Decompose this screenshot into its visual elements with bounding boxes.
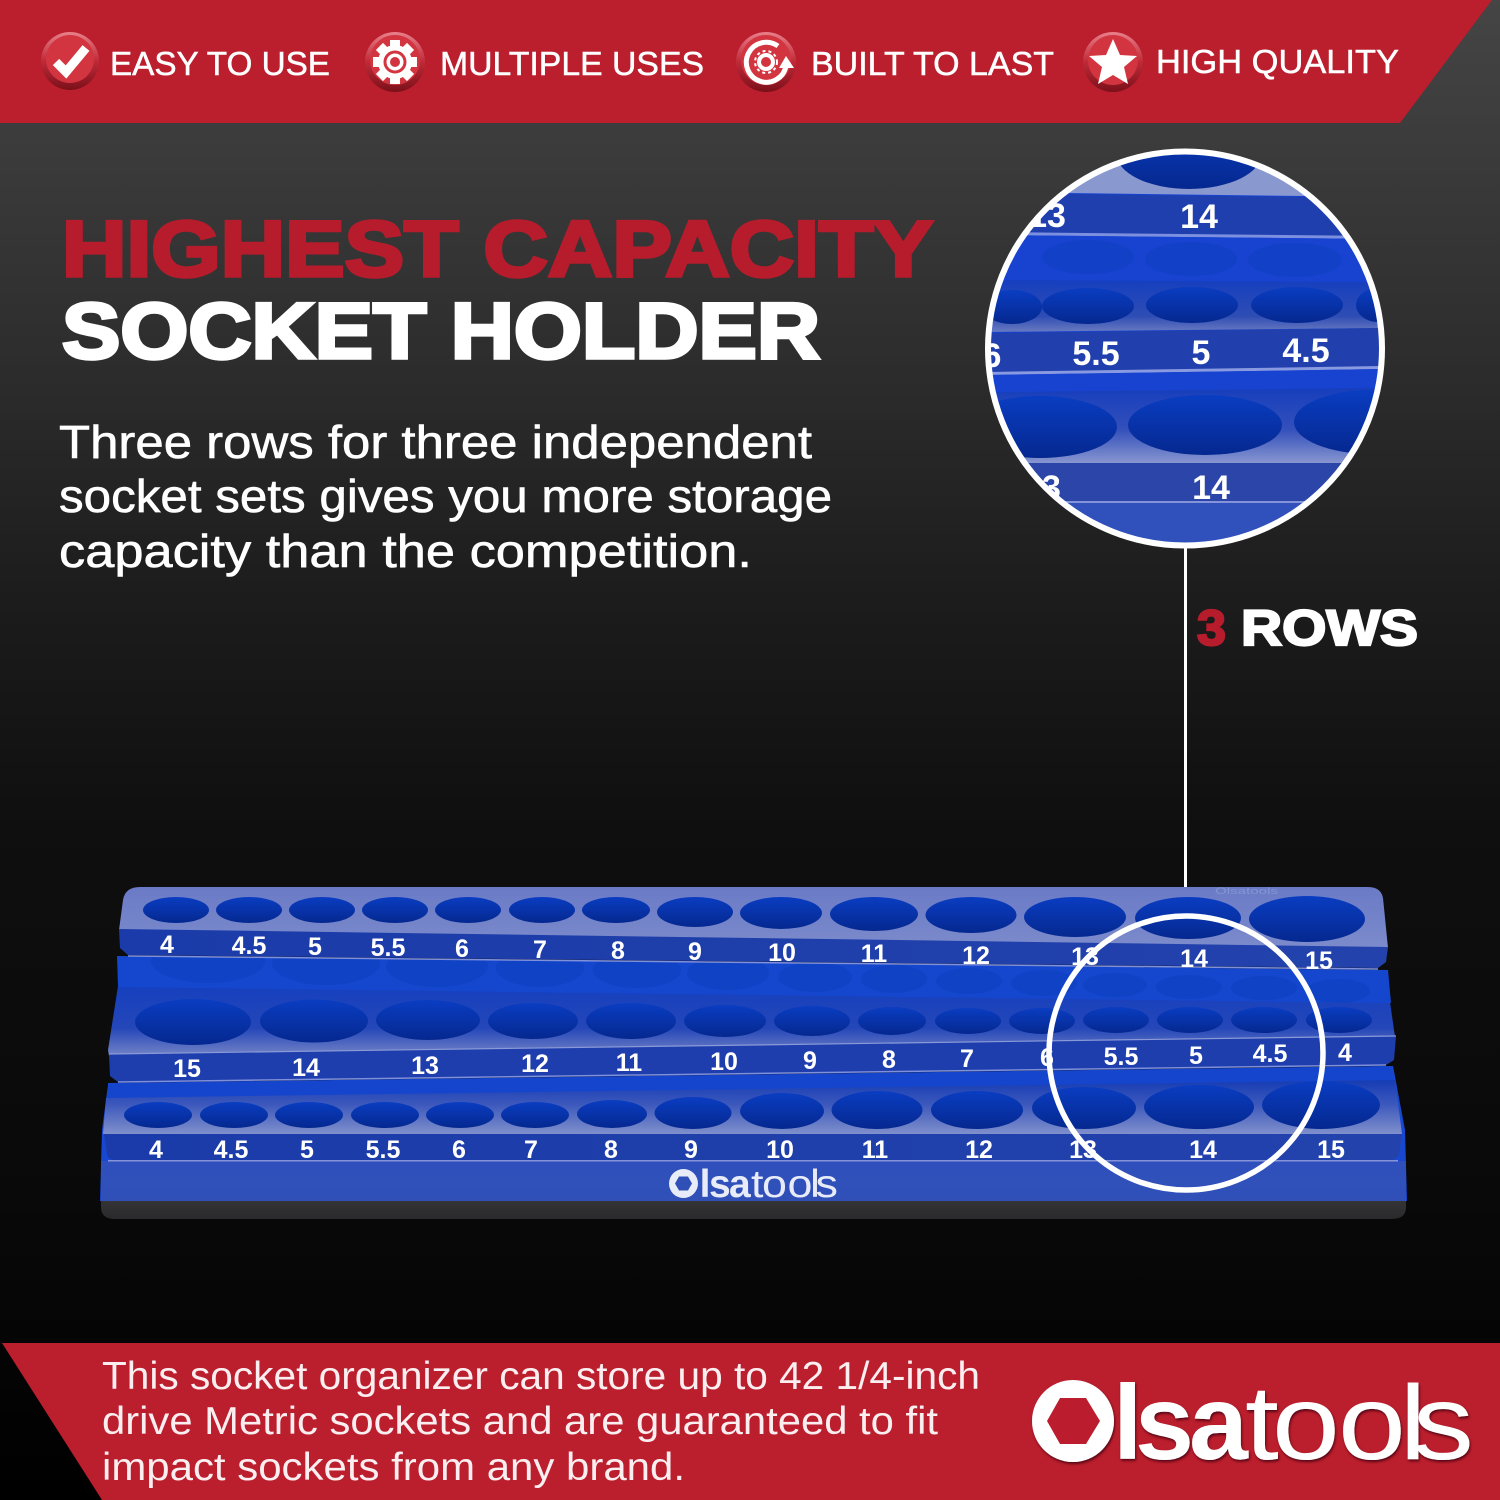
bottom row labels bbox=[149, 1136, 1345, 1164]
bottom row sockets bbox=[124, 1081, 1380, 1129]
badge: easy to use bbox=[41, 32, 330, 90]
bottom row labels: 14 bbox=[1189, 1136, 1217, 1164]
top row labels: 4 bbox=[160, 931, 174, 959]
heading: HIGHEST CAPACITY bbox=[62, 204, 933, 293]
middle row labels: 8 bbox=[882, 1046, 896, 1074]
middle row labels: 12 bbox=[521, 1050, 549, 1078]
middle row sockets bbox=[135, 999, 1372, 1045]
bottom row labels: 11 bbox=[862, 1136, 888, 1164]
top row labels: 5.5 bbox=[371, 934, 405, 962]
badge: multiple uses bbox=[365, 32, 704, 92]
magnified lens: 14 bbox=[1192, 469, 1230, 507]
top red banner bbox=[0, 0, 1492, 123]
front face bbox=[101, 1161, 1406, 1201]
top row labels: 14 bbox=[1180, 945, 1208, 973]
bottom row labels: 15 bbox=[1317, 1136, 1345, 1164]
middle row labels: 13 bbox=[411, 1052, 439, 1080]
bottom row labels: 10 bbox=[766, 1136, 794, 1164]
bottom row labels: 13 bbox=[1069, 1136, 1097, 1164]
middle row labels bbox=[173, 1039, 1352, 1083]
badge: built to last bbox=[736, 32, 1054, 92]
brand logo: lsa bbox=[1113, 1364, 1249, 1482]
top row labels: 11 bbox=[861, 940, 887, 968]
bottom row labels: 9 bbox=[684, 1136, 698, 1164]
bottom red banner bbox=[2, 1343, 1500, 1500]
top row labels: 12 bbox=[962, 942, 990, 970]
brand logo: tools bbox=[1245, 1364, 1474, 1482]
faint engraved logo: Olsatools bbox=[1215, 886, 1279, 896]
product logo: Olsa bbox=[668, 1163, 751, 1206]
product logo: tools bbox=[751, 1162, 838, 1205]
bottom row labels: 6 bbox=[452, 1136, 466, 1164]
heading bbox=[62, 204, 933, 375]
top tier riser with reflections bbox=[117, 956, 1391, 1003]
banner description: impact sockets from any brand. bbox=[102, 1446, 685, 1489]
socket holder product bbox=[100, 886, 1407, 1219]
middle label band bbox=[109, 1036, 1396, 1082]
middle row labels: 4 bbox=[1338, 1039, 1352, 1067]
magnified lens: 14 bbox=[1180, 198, 1218, 236]
magnified lens: 5 bbox=[1192, 334, 1210, 372]
heading: SOCKET HOLDER bbox=[62, 286, 820, 375]
top row labels: 10 bbox=[768, 939, 796, 967]
top row labels: 5 bbox=[308, 933, 322, 961]
3 rows callout: ROWS bbox=[1241, 600, 1418, 656]
middle tier riser bbox=[108, 1066, 1394, 1098]
middle row labels: 6 bbox=[1040, 1044, 1054, 1072]
magnified lens: 5.5 bbox=[1072, 335, 1120, 373]
3 rows callout: 3 bbox=[1197, 600, 1226, 656]
badge: high quality bbox=[1083, 32, 1399, 92]
badge: multiple uses: MULTIPLE USES bbox=[440, 45, 704, 82]
top row labels bbox=[160, 931, 1333, 975]
bottom tier body bbox=[100, 1066, 1407, 1201]
top row labels: 4.5 bbox=[232, 932, 266, 960]
bottom row labels: 5.5 bbox=[366, 1136, 400, 1164]
middle row labels: 4.5 bbox=[1253, 1040, 1287, 1068]
middle row labels: 7 bbox=[960, 1045, 974, 1073]
top tier surface bbox=[119, 887, 1388, 948]
top row labels: 13 bbox=[1071, 943, 1099, 971]
body text: Three rows for three independent bbox=[59, 416, 812, 468]
middle row labels: 11 bbox=[616, 1049, 642, 1077]
top row labels: 6 bbox=[455, 935, 469, 963]
badge: built to last: BUILT TO LAST bbox=[811, 45, 1054, 82]
magnified lens bbox=[985, 148, 1385, 548]
magnified lens: 6 bbox=[983, 337, 1001, 375]
middle row labels: 5 bbox=[1189, 1042, 1203, 1070]
top row labels: 15 bbox=[1305, 947, 1333, 975]
black rubber base bbox=[101, 1190, 1406, 1219]
top row sockets bbox=[143, 896, 1365, 942]
banner description: This socket organizer can store up to 42 1/4-inch bbox=[102, 1355, 980, 1398]
zoom indicator ring bbox=[1049, 916, 1323, 1190]
top row labels: 9 bbox=[688, 938, 702, 966]
badge: high quality: HIGH QUALITY bbox=[1156, 43, 1399, 80]
body text: capacity than the competition. bbox=[59, 525, 752, 577]
middle row labels: 10 bbox=[710, 1048, 738, 1076]
body text bbox=[59, 416, 832, 577]
brand logo: O bbox=[1033, 1364, 1115, 1482]
banner description bbox=[102, 1355, 980, 1489]
product logo bbox=[668, 1162, 838, 1206]
brand logo bbox=[1032, 1364, 1474, 1482]
magnified lens: 13 bbox=[1023, 469, 1061, 507]
middle tier surface bbox=[108, 986, 1395, 1056]
top row labels: 7 bbox=[533, 936, 547, 964]
bottom row labels: 8 bbox=[604, 1136, 618, 1164]
top row labels: 8 bbox=[611, 937, 625, 965]
body text: socket sets gives you more storage bbox=[59, 470, 832, 522]
bottom label band bbox=[104, 1134, 1402, 1160]
bottom row labels: 12 bbox=[965, 1136, 993, 1164]
bottom row labels: 5 bbox=[300, 1136, 314, 1164]
middle row labels: 15 bbox=[173, 1055, 201, 1083]
top label band bbox=[119, 929, 1388, 968]
bottom row labels: 4.5 bbox=[214, 1136, 248, 1164]
badge: easy to use: EASY TO USE bbox=[110, 45, 330, 82]
banner description: drive Metric sockets and are guaranteed to fit bbox=[102, 1400, 938, 1443]
bottom row labels: 4 bbox=[149, 1136, 163, 1164]
connector line bbox=[1184, 546, 1187, 915]
bottom row labels: 7 bbox=[524, 1136, 538, 1164]
middle row labels: 9 bbox=[803, 1047, 817, 1075]
magnified lens: 4.5 bbox=[1282, 332, 1330, 370]
middle row labels: 5.5 bbox=[1104, 1043, 1138, 1071]
magnified lens: 13 bbox=[1028, 197, 1066, 235]
bottom tier surface bbox=[103, 1080, 1402, 1134]
middle row labels: 14 bbox=[292, 1054, 320, 1082]
